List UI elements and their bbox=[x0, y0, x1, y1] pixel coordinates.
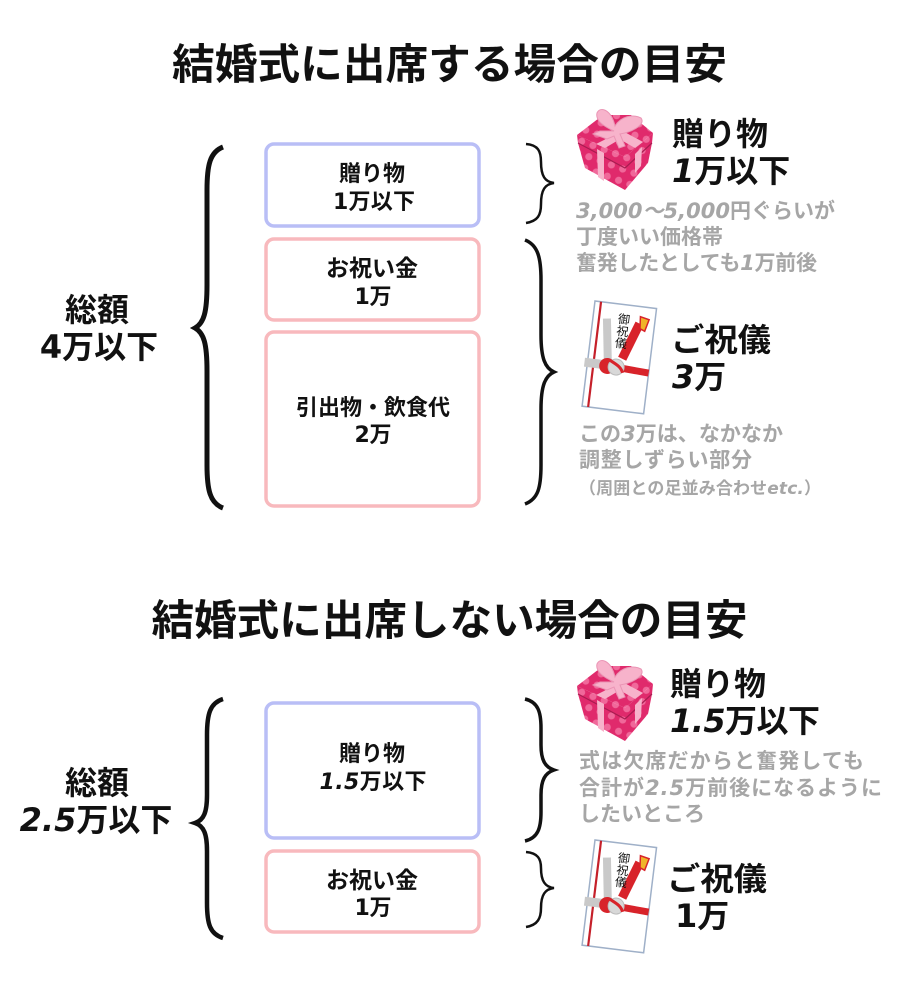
goshugi note: （周囲との足並み合わせetc.） bbox=[579, 479, 821, 499]
gift heading: 1万以下 bbox=[672, 152, 790, 190]
section: not attending breakdown bbox=[20, 660, 882, 953]
goshugi note: この3万は、なかなか bbox=[579, 422, 783, 446]
total label: 2.5万以下 bbox=[20, 801, 172, 839]
gift note: 奮発したとしても1万前後 bbox=[576, 251, 817, 275]
icon: goshugi envelope bbox=[579, 301, 657, 414]
icon: goshugi envelope bbox=[579, 840, 657, 953]
right brace: gift bbox=[525, 699, 554, 841]
box: gift: 1.5万以下 bbox=[320, 770, 426, 795]
box: gift: 贈り物 bbox=[339, 162, 405, 187]
goshugi heading: ご祝儀 bbox=[671, 321, 771, 359]
gift note: 式は欠席だからと奮発しても bbox=[579, 749, 864, 773]
total label: 総額 bbox=[65, 764, 129, 802]
title: not attending: 結婚式に出席しない場合の目安 bbox=[152, 596, 748, 645]
gift note: したいところ bbox=[579, 802, 705, 826]
left brace: total bbox=[195, 147, 223, 508]
goshugi heading: ご祝儀 bbox=[667, 860, 767, 898]
gift note: 合計が2.5万前後になるように bbox=[579, 776, 882, 800]
box: celebration money: お祝い金 bbox=[326, 868, 418, 894]
gift heading: 贈り物 bbox=[672, 115, 768, 153]
right brace: gift bbox=[526, 144, 554, 223]
total label: 総額 bbox=[65, 291, 129, 329]
box: celebration money: 1万 bbox=[354, 896, 392, 921]
box: favors and food: 2万 bbox=[354, 423, 392, 448]
total label bbox=[20, 764, 172, 839]
total label bbox=[40, 291, 158, 366]
box: gift bbox=[266, 144, 479, 226]
left brace: total bbox=[195, 699, 223, 938]
goshugi heading: 3万 bbox=[672, 358, 726, 396]
box: celebration money bbox=[266, 239, 479, 320]
icon: gift box bbox=[577, 109, 653, 190]
goshugi heading bbox=[667, 860, 767, 935]
gift note: 丁度いい価格帯 bbox=[576, 225, 723, 249]
section: attending breakdown bbox=[40, 109, 835, 508]
title: attending: 結婚式に出席する場合の目安 bbox=[172, 40, 727, 89]
goshugi heading bbox=[671, 321, 771, 396]
gift heading: 1.5万以下 bbox=[670, 702, 820, 740]
gift note: 3,000〜5,000円ぐらいが bbox=[576, 199, 835, 223]
gift note bbox=[576, 199, 835, 275]
icon: gift box bbox=[577, 660, 653, 741]
box: gift: 1万以下 bbox=[333, 190, 415, 215]
goshugi heading: 1万 bbox=[675, 897, 729, 935]
gift heading: 贈り物 bbox=[670, 665, 766, 703]
goshugi note: 調整しずらい部分 bbox=[579, 448, 752, 472]
gift note bbox=[579, 749, 882, 826]
right brace: goshugi bbox=[526, 852, 554, 927]
gift heading bbox=[670, 665, 820, 740]
box: gift bbox=[266, 703, 479, 838]
box: favors and food: 引出物・飲食代 bbox=[296, 396, 450, 421]
total label: 4万以下 bbox=[40, 328, 158, 366]
box: celebration money bbox=[266, 851, 479, 932]
gift heading bbox=[672, 115, 790, 190]
box: celebration money: 1万 bbox=[354, 285, 392, 310]
box: celebration money: お祝い金 bbox=[326, 256, 418, 282]
right brace: goshugi bbox=[525, 240, 554, 504]
goshugi note bbox=[579, 422, 821, 499]
box: favors and food bbox=[266, 332, 479, 506]
box: gift: 贈り物 bbox=[339, 742, 405, 767]
